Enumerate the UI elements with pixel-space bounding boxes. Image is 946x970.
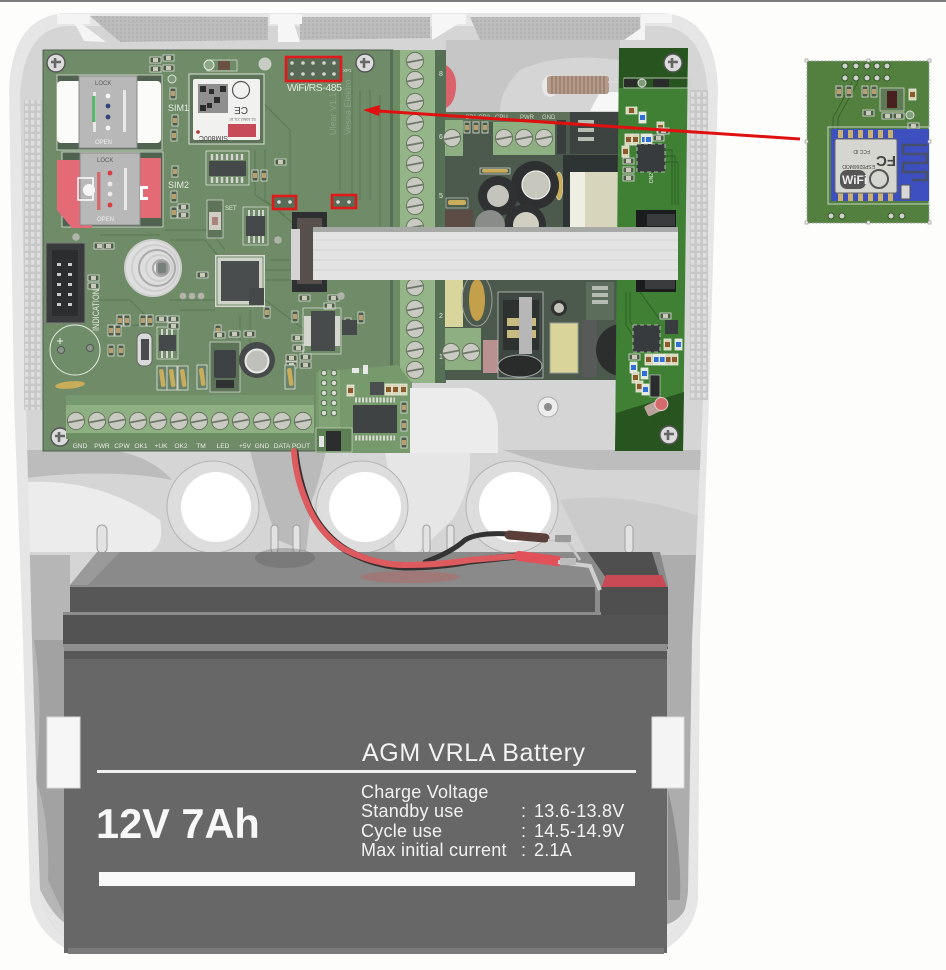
capacity label: 12V 7Ah xyxy=(96,800,260,847)
main PCB xyxy=(43,50,393,451)
parts xyxy=(836,86,919,129)
battery specs: : xyxy=(521,840,526,860)
blue module xyxy=(828,127,929,204)
terminal labels xyxy=(73,443,310,450)
terminal strip vertical xyxy=(390,50,446,383)
ventilation slots left xyxy=(24,100,43,410)
DN2 chip: DN2 xyxy=(649,173,655,183)
shading blotches xyxy=(20,40,710,950)
PCB traces xyxy=(90,70,380,345)
WiFi/RS-485 connector highlight: XP1 xyxy=(343,68,352,73)
battery specs: 2.1A xyxy=(534,840,572,860)
yellow transformer top xyxy=(563,155,621,230)
black connector xyxy=(636,210,676,292)
terminal strip vertical: 1 xyxy=(439,354,443,361)
UT8 chip xyxy=(157,327,178,359)
terminal labels: GND xyxy=(73,443,88,450)
SIM1 holder: OPEN xyxy=(95,140,112,146)
antenna pad xyxy=(624,78,690,88)
battery heading: AGM VRLA Battery xyxy=(362,739,586,767)
terminal labels: CPW xyxy=(114,443,130,450)
SIM800C modem: SIM800C xyxy=(199,134,228,141)
SIM labels: SIM1 xyxy=(168,103,189,113)
metal shield with rotated print: FC xyxy=(876,152,896,169)
terminal labels: +UK xyxy=(154,443,168,450)
parts top xyxy=(622,107,669,181)
power board: PWR xyxy=(520,115,535,121)
DD3 chip xyxy=(206,151,249,185)
small resistors middle xyxy=(72,233,364,368)
terminal labels: PWR xyxy=(94,443,110,450)
battery specs: 13.6-13.8V xyxy=(534,801,625,821)
knockout holes xyxy=(167,461,558,553)
metal shield with rotated print: ESP8266MOD xyxy=(842,163,875,169)
black wire xyxy=(425,534,510,562)
green terminals xyxy=(443,120,555,156)
SIM800C modem: CE xyxy=(234,104,248,115)
battery specs: : xyxy=(521,821,526,841)
DA2 regulator xyxy=(210,342,240,392)
parts bottom xyxy=(629,313,682,397)
antenna meander xyxy=(903,145,927,180)
header pads xyxy=(842,63,890,81)
INDICATION label: INDICATION xyxy=(91,289,101,331)
power board: GND xyxy=(542,115,556,121)
terminal labels: POUT xyxy=(292,443,310,450)
SIM800C modem: S2-10862-Z1L1E xyxy=(229,117,256,121)
ventilation slots right xyxy=(690,90,708,400)
red jumper highlight 1 xyxy=(273,196,296,209)
terminal strip vertical: 6 xyxy=(439,134,443,141)
white connector block xyxy=(410,388,498,453)
power board: CPU xyxy=(495,115,508,121)
retaining clip left xyxy=(47,717,80,788)
SIM1 holder xyxy=(57,75,162,150)
slot marks xyxy=(97,525,633,553)
main PCB: SIM2 xyxy=(168,180,189,190)
selection handles xyxy=(805,59,931,224)
power board xyxy=(442,112,648,380)
daughter board xyxy=(316,365,412,453)
SIM2 holder: LOCK xyxy=(97,158,113,164)
retaining clip right xyxy=(652,717,684,788)
terminal labels: GND xyxy=(255,443,270,450)
DD9 chip xyxy=(303,308,341,354)
terminal labels: LED xyxy=(217,443,230,450)
terminal labels: TM xyxy=(196,443,206,450)
bottom terminal block xyxy=(66,395,314,439)
electrolytic capacitor xyxy=(239,342,275,378)
terminal labels: OK2 xyxy=(174,443,188,450)
WiFi/RS-485 label: WiFi/RS-485 xyxy=(287,82,342,94)
red varistor xyxy=(446,65,456,108)
battery specs: Max initial current xyxy=(361,840,507,860)
battery heading rule xyxy=(97,770,636,773)
screws xyxy=(47,54,65,72)
WiFi/RS-485 connector highlight xyxy=(286,57,352,81)
DN2 chip xyxy=(637,144,665,183)
battery specs: : xyxy=(521,801,526,821)
antenna spring xyxy=(542,75,622,97)
battery specs xyxy=(361,782,625,860)
battery specs: Standby use xyxy=(361,801,464,821)
power board labels: CP1 CP2 xyxy=(465,115,491,121)
battery specs: Cycle use xyxy=(361,821,442,841)
spiral spring xyxy=(125,240,181,296)
mounting post xyxy=(538,397,558,417)
top edge line xyxy=(0,0,946,2)
wire terminals on battery xyxy=(548,535,600,590)
main PCB: Vesna Elektro xyxy=(343,79,353,135)
SIM2 holder xyxy=(57,152,163,228)
red jumper highlight 2 xyxy=(332,195,356,208)
red wire xyxy=(295,452,518,567)
photo LED xyxy=(643,395,670,417)
IDC indication connector xyxy=(46,243,85,323)
lower parts xyxy=(442,274,648,378)
screws xyxy=(664,54,682,72)
battery white bar xyxy=(99,872,635,886)
terminal labels: DATA xyxy=(274,443,291,450)
ribbon cable xyxy=(313,227,678,280)
terminal labels: OK1 xyxy=(134,443,148,450)
ribbon connector xyxy=(291,212,327,292)
MCU chip xyxy=(215,255,265,307)
micro USB xyxy=(137,333,152,366)
metal shield with rotated print xyxy=(835,139,897,193)
SIM800C modem xyxy=(189,74,264,144)
terminal labels: +5V xyxy=(239,443,252,450)
capacitors xyxy=(475,161,559,246)
metal shield with rotated print: FCC ID xyxy=(853,148,870,154)
battery specs: Charge Voltage xyxy=(361,782,489,802)
DD2 chip xyxy=(243,207,268,245)
terminal strip vertical: 2 xyxy=(439,313,443,320)
battery specs: 14.5-14.9V xyxy=(534,821,625,841)
enclosure xyxy=(9,13,718,950)
top hatch xyxy=(90,16,268,42)
DN1 chip xyxy=(633,320,678,352)
yellow fuse FU4 xyxy=(55,380,85,390)
terminal strip vertical: 8 xyxy=(439,71,443,78)
Wi-Fi module inset xyxy=(805,59,931,224)
top SMD parts xyxy=(150,55,286,218)
battery wires xyxy=(294,451,558,567)
SET button: SET xyxy=(225,206,237,212)
metal shield with rotated print: WiFi xyxy=(842,173,867,187)
board labels faint: Ulear V1.1 xyxy=(328,92,338,135)
bottom pads xyxy=(828,213,905,219)
SIM1 holder: LOCK xyxy=(95,81,111,87)
terminal strip vertical: 5 xyxy=(439,193,443,200)
right PCB xyxy=(615,48,690,451)
SET button xyxy=(207,200,237,238)
SIM2 holder: OPEN xyxy=(97,217,114,223)
small parts xyxy=(445,112,620,228)
buzzer xyxy=(50,325,100,375)
red arrow xyxy=(363,105,800,139)
battery xyxy=(63,548,668,954)
fuses xyxy=(157,365,295,390)
